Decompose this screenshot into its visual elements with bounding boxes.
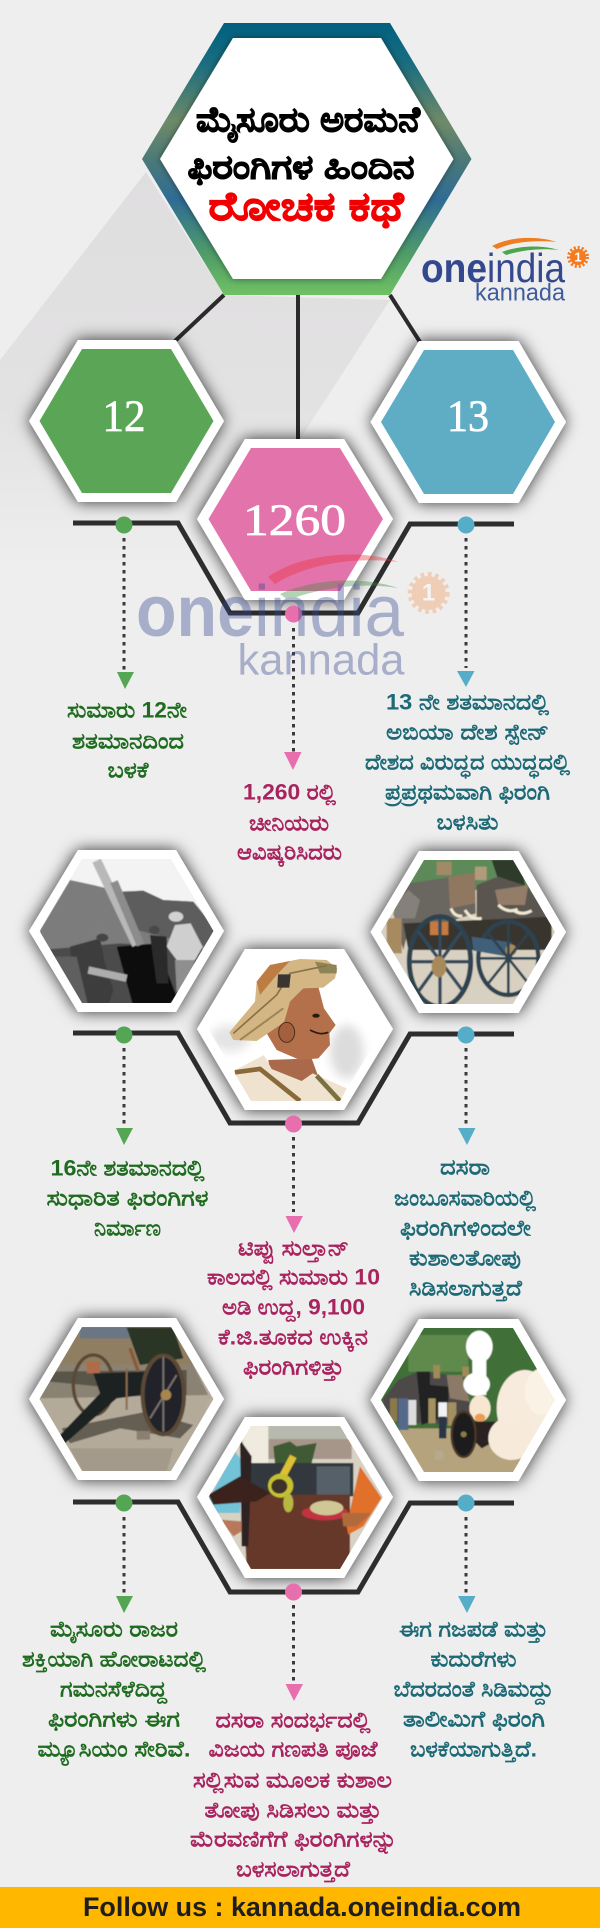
photo hexagon: Tipu Sultan portrait: [190, 945, 400, 1115]
watermark logo: 1: [422, 580, 435, 606]
section 1 text: green: [67, 698, 188, 782]
section 1 text: blue: ಅಬಿಯಾ ದೇಶ ಸ್ಪೇನ್: [386, 720, 549, 746]
section 2 markers: [116, 1026, 476, 1233]
hexagon: 13: 13: [447, 392, 489, 440]
title text: ಮೈಸೂರು ಅರಮನೆ: [196, 100, 421, 144]
hexagon: 1260: [197, 439, 393, 600]
hexagon: 12: [29, 340, 224, 502]
section 2 text: pink: ಟಿಪ್ಪು ಸುಲ್ತಾನ್: [238, 1236, 349, 1265]
section 1 text: blue: [365, 690, 571, 834]
section 3 text: blue: ಬೆದರದಂತೆ ಸಿಡಿಮದ್ದು: [394, 1676, 554, 1706]
diagonal shadow beam behind title: [0, 172, 390, 640]
photo hexagon: puja offering to cannon: [190, 1413, 400, 1583]
dashed leader: blue: [464, 538, 468, 668]
section 2 text: pink: ಕೆ.ಜಿ.ತೂಕದ ಉಕ್ಕಿನ: [218, 1324, 368, 1353]
section 1 text: pink: [237, 780, 342, 868]
section 3 text: green: ಶಕ್ತಿಯಾಗಿ ಹೋರಾಟದಲ್ಲಿ: [22, 1646, 207, 1674]
section 3 text: pink: ಬಳಸಲಾಗುತ್ತದೆ: [236, 1856, 351, 1884]
section 2 text: green: ಸುಧಾರಿತ ಫಿರಂಗಿಗಳ: [46, 1186, 209, 1210]
section 2 text: blue: ಕುಶಾಲತೋಪು: [409, 1246, 521, 1270]
footer bar: [0, 1887, 600, 1928]
section 1 text: green: ಸುಮಾರು 12ನೇ: [67, 698, 188, 722]
section 2 text: blue: ಜಂಬೂಸವಾರಿಯಲ್ಲಿ: [394, 1186, 537, 1212]
section 1 text: pink: ಆವಿಷ್ಕರಿಸಿದರು: [237, 840, 342, 868]
watermark logo: india: [254, 572, 405, 652]
section 2 text: blue: ಫಿರಂಗಿಗಳಿಂದಲೇ: [400, 1216, 532, 1240]
hexagon: 12: 12: [102, 392, 146, 440]
hexagon: 1260: 1260: [243, 496, 346, 544]
section 3 text: pink: ಸಲ್ಲಿಸುವ ಮೂಲಕ ಕುಶಾಲ: [193, 1768, 392, 1794]
section 1 text: green: ಶತಮಾನದಿಂದ: [72, 728, 184, 754]
photo hexagon: cannon firing: [365, 1315, 575, 1485]
section 3 text: green: ಫಿರಂಗಿಗಳು ಈಗ: [48, 1706, 180, 1732]
logo: oneindia kannada: 1: [574, 250, 582, 264]
section 3 text: blue: ಈಗ ಗಜಪಡೆ ಮತ್ತು: [399, 1616, 548, 1644]
section 3 timeline: [73, 1502, 514, 1682]
title hexagon: [142, 23, 472, 295]
section 1 text: blue: ಬಳಸಿತು: [436, 810, 498, 834]
section 3 text: green: ಮ್ಯೂಸಿಯಂ ಸೇರಿವೆ.: [38, 1736, 190, 1767]
section 2 text: blue: ಸಿಡಿಸಲಾಗುತ್ತದೆ: [409, 1276, 523, 1302]
watermark logo: [136, 555, 447, 684]
section 1 text: green: ಬಳಕೆ: [108, 758, 150, 782]
section 3 text: green: [22, 1616, 207, 1767]
hexagon: 13: [370, 341, 566, 503]
section 3 text: blue: ತಾಲೀಮಿಗೆ ಫಿರಂಗಿ: [403, 1706, 545, 1732]
section 3 text: blue: ಬಳಕೆಯಾಗುತ್ತಿದೆ.: [410, 1736, 537, 1764]
section 3 text: pink: ಮೆರವಣಿಗೆಗೆ ಫಿರಂಗಿಗಳನ್ನು: [190, 1826, 397, 1855]
connector lines from title to hexagons: [175, 295, 420, 440]
section 3 text: green: ಮೈಸೂರು ರಾಜರ: [50, 1616, 178, 1644]
section 3 text: green: ಗಮನಸೆಳೆದಿದ್ದ: [60, 1676, 168, 1705]
logo: oneindia kannada: kannada: [475, 280, 566, 306]
section 3 text: pink: ವಿಜಯ ಗಣಪತಿ ಪೂಜೆ: [208, 1736, 379, 1762]
section 1 text: pink: ಚೀನಿಯರು: [249, 810, 329, 836]
dashed leader: pink: [292, 628, 295, 752]
section 2 text: green: [46, 1156, 209, 1240]
photo hexagon: elephants with cannon: [365, 850, 575, 1020]
section 2 text: green: 16ನೇ ಶತಮಾನದಲ್ಲಿ: [50, 1156, 206, 1182]
section 2 text: pink: ಕಾಲದಲ್ಲಿ ಸುಮಾರು 10: [207, 1264, 380, 1292]
title text: ಫಿರಂಗಿಗಳ ಹಿಂದಿನ: [188, 148, 414, 186]
footer bar: Follow us : kannada.oneindia.com: [83, 1892, 521, 1922]
section 3 markers: [116, 1494, 476, 1701]
photo hexagon: museum cannon on road: [20, 1315, 230, 1485]
photo hexagon: soldiers with artillery: [20, 850, 230, 1020]
section 1 timeline: [73, 523, 514, 752]
watermark logo: kannada: [238, 636, 405, 684]
section 1 text: pink: 1,260 ರಲ್ಲಿ: [243, 780, 337, 806]
section 1 text: blue: ಪ್ರಪ್ರಥಮವಾಗಿ ಫಿರಂಗಿ: [383, 780, 550, 806]
section 3 text: pink: ದಸರಾ ಸಂದರ್ಭದಲ್ಲಿ: [216, 1708, 372, 1734]
section 2 text: blue: [394, 1154, 537, 1302]
section 1 text: blue: ದೇಶದ ವಿರುದ್ಧದ ಯುದ್ಧದಲ್ಲಿ: [365, 750, 571, 780]
section 2 text: green: ನಿರ್ಮಾಣ: [94, 1216, 161, 1240]
section 2 text: pink: ಫಿರಂಗಿಗಳಿತ್ತು: [243, 1354, 344, 1382]
section 3 text: blue: ಕುದುರೆಗಳು: [430, 1646, 517, 1672]
section 2 timeline: [73, 1033, 514, 1212]
section 2 text: pink: ಅಡಿ ಉದ್ದ, 9,100: [222, 1294, 365, 1323]
section 2 text: pink: [207, 1236, 380, 1382]
section 3 text: pink: [190, 1708, 397, 1884]
section 1 text: blue: 13 ನೇ ಶತಮಾನದಲ್ಲಿ: [386, 690, 550, 716]
section 3 text: pink: ತೋಪು ಸಿಡಿಸಲು ಮತ್ತು: [204, 1798, 382, 1825]
watermark logo: one: [136, 572, 254, 652]
dashed leader: green: [122, 538, 126, 670]
logo: oneindia kannada: one: [421, 245, 487, 291]
section 1 markers: [116, 516, 474, 770]
title text: ರೋಚಕ ಕಥೆ: [208, 185, 405, 229]
section 3 text: blue: [394, 1616, 554, 1764]
title text: [188, 100, 421, 229]
logo: oneindia kannada: [421, 238, 587, 306]
logo: oneindia kannada: india: [487, 245, 565, 291]
section 2 text: blue: ದಸರಾ: [440, 1154, 490, 1180]
